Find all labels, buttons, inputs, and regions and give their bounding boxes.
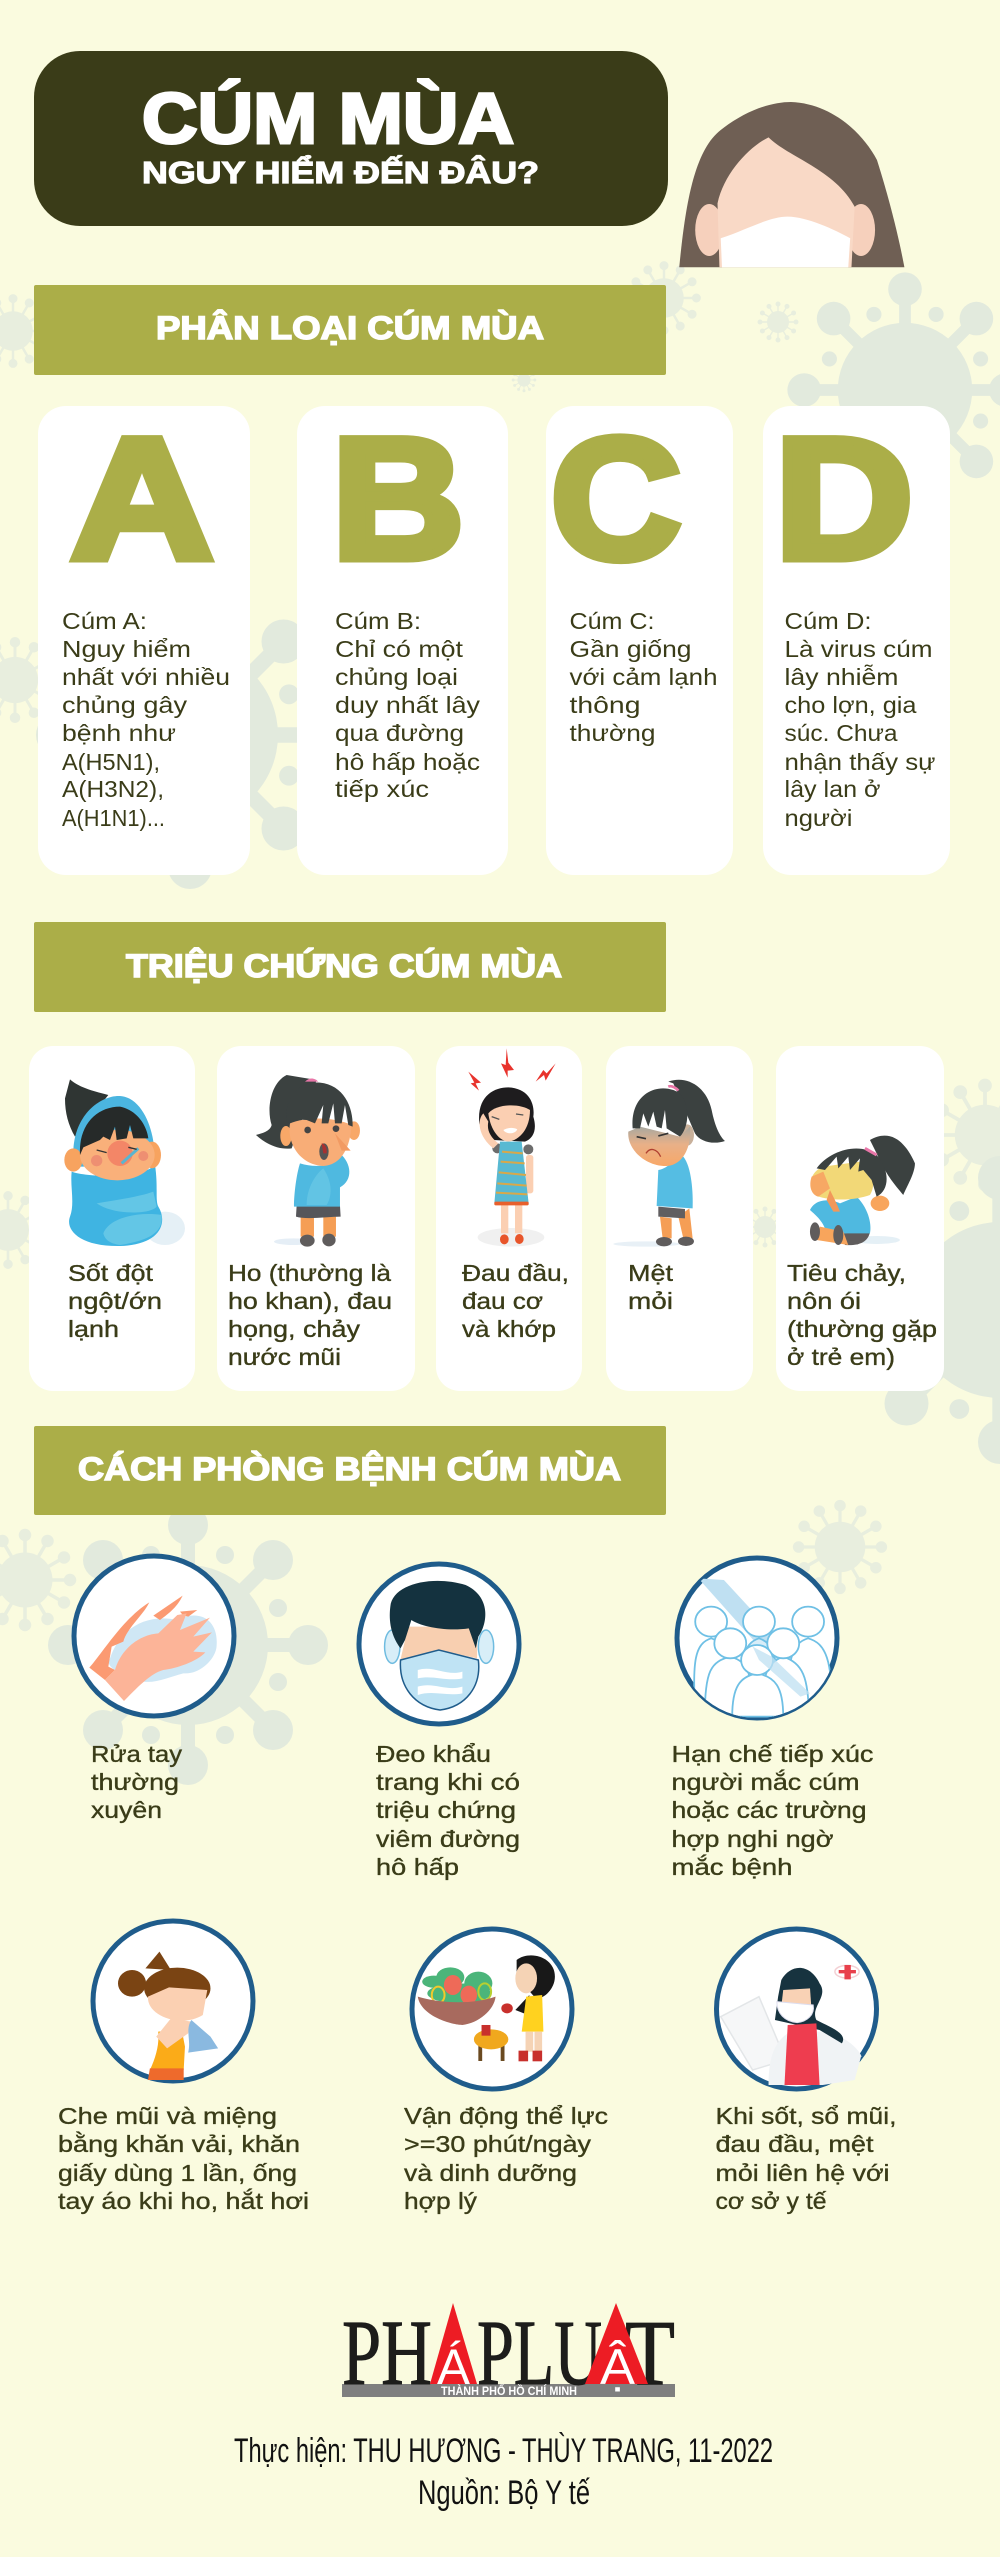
panel: đau đầu bbox=[436, 1046, 582, 1391]
icon: child with headache bbox=[468, 1048, 556, 1247]
panel: rửa tay bbox=[74, 1556, 234, 1823]
text: hạn chế tiếp xúc: hoặc các trường bbox=[672, 1797, 866, 1823]
letter D: D bbox=[775, 403, 913, 595]
subtitle: NGUY HIỂM ĐẾN ĐÂU? bbox=[142, 154, 539, 190]
main title: CÚM MÙA bbox=[142, 80, 514, 159]
description A: chủng gây bbox=[62, 692, 188, 718]
description B: Cúm B: bbox=[335, 608, 421, 634]
text: hạn chế tiếp xúc bbox=[672, 1741, 874, 1880]
panel: vận động dinh dưỡng bbox=[404, 1929, 608, 2214]
text: ho: Ho (thường là bbox=[228, 1260, 391, 1286]
text: tiêu chảy: ở trẻ em) bbox=[787, 1344, 895, 1370]
heading: phân loại: PHÂN LOẠI CÚM MÙA bbox=[156, 310, 544, 346]
icon: sitting child with nausea bbox=[810, 1136, 915, 1245]
panel: đeo khẩu trang bbox=[359, 1564, 520, 1880]
text: che mũi miệng: giấy dùng 1 lần, ống bbox=[58, 2160, 297, 2186]
logo: Pháp Luật: T bbox=[625, 2302, 675, 2405]
source line: Nguồn: Bộ Y tế bbox=[418, 2474, 590, 2512]
description C: Cúm C: bbox=[570, 608, 654, 634]
panel: tiêu chảy bbox=[776, 1046, 944, 1391]
description D: người bbox=[784, 805, 852, 831]
letter C: C bbox=[551, 403, 681, 595]
text: vận động bbox=[404, 2103, 608, 2214]
text: liên hệ y tế bbox=[716, 2103, 896, 2214]
description D: súc. Chưa bbox=[784, 720, 898, 746]
icon: salad bowl and woman bbox=[412, 1929, 572, 2089]
text: ho: nước mũi bbox=[228, 1344, 341, 1370]
letter B: B bbox=[332, 403, 464, 595]
text: đau đầu: Đau đầu, bbox=[462, 1260, 569, 1286]
text: tiêu chảy: nôn ói bbox=[787, 1288, 861, 1314]
description C: thường bbox=[570, 720, 656, 746]
description D: lây lan ở bbox=[784, 776, 880, 802]
icon: man wearing mask bbox=[359, 1564, 519, 1724]
text: đau đầu: đau cơ bbox=[462, 1288, 543, 1314]
text: ho bbox=[228, 1260, 392, 1370]
panel: sốt bbox=[29, 1046, 195, 1391]
text: tiêu chảy: (thường gặp bbox=[787, 1316, 937, 1342]
letter A: A bbox=[71, 403, 213, 595]
panel: cúm D bbox=[763, 403, 950, 875]
text: đeo khẩu trang: viêm đường bbox=[376, 1826, 520, 1852]
description B bbox=[335, 608, 481, 802]
text: hạn chế tiếp xúc: Hạn chế tiếp xúc bbox=[672, 1741, 874, 1767]
text: mệt mỏi bbox=[628, 1260, 674, 1314]
description D: lây nhiễm bbox=[784, 664, 898, 690]
heading: triệu chứng: TRIỆU CHỨNG CÚM MÙA bbox=[126, 948, 562, 984]
description C: Gần giống bbox=[570, 636, 692, 662]
text: che mũi miệng: tay áo khi ho, hắt hơi bbox=[58, 2188, 309, 2214]
background virus pattern bbox=[0, 262, 1000, 1785]
description C: với cảm lạnh bbox=[570, 664, 718, 690]
logo: Pháp Luật: THÀNH PHỐ HỒ CHÍ MINH bbox=[441, 2383, 577, 2398]
icon: child coughing bbox=[256, 1075, 360, 1247]
text: liên hệ y tế: mỏi liên hệ với bbox=[716, 2160, 890, 2186]
text: đeo khẩu trang: Đeo khẩu bbox=[376, 1741, 491, 1767]
text: ho: ho khan), đau bbox=[228, 1288, 392, 1314]
description A: A(H3N2), bbox=[62, 776, 164, 802]
text: mệt mỏi: Mệt bbox=[628, 1260, 674, 1286]
text: hạn chế tiếp xúc: hợp nghi ngờ bbox=[672, 1826, 834, 1852]
text: ho: họng, chảy bbox=[228, 1316, 361, 1342]
panel: hạn chế tiếp xúc bbox=[672, 1558, 874, 1880]
icon: crowd crossed out bbox=[677, 1558, 837, 1718]
description A: A(H5N1), bbox=[62, 749, 160, 775]
panel: che mũi miệng bbox=[58, 1921, 309, 2214]
description D: Cúm D: bbox=[784, 608, 872, 634]
icon: girl covering nose with tissue bbox=[93, 1921, 253, 2081]
icon: doctor with mask bbox=[716, 1929, 876, 2089]
text: sốt bbox=[68, 1260, 162, 1342]
logo: Pháp Luật: PLU bbox=[477, 2302, 602, 2405]
panel: cúm A bbox=[38, 403, 250, 875]
description B: Chỉ có một bbox=[335, 636, 464, 662]
description B: hô hấp hoặc bbox=[335, 749, 480, 775]
icon: washing hands bbox=[74, 1556, 234, 1716]
text: sốt: ngột/ớn bbox=[68, 1288, 162, 1314]
text: rửa tay: xuyên bbox=[91, 1797, 162, 1823]
heading: triệu chứng bbox=[34, 922, 666, 1012]
text: hạn chế tiếp xúc: người mắc cúm bbox=[672, 1769, 860, 1795]
icon: child wrapped in blanket with thermometer bbox=[64, 1079, 185, 1246]
description A: nhất với nhiều bbox=[62, 664, 230, 690]
text: đeo khẩu trang bbox=[376, 1741, 520, 1880]
text: tiêu chảy bbox=[787, 1260, 937, 1370]
heading: cách phòng bệnh: CÁCH PHÒNG BỆNH CÚM MÙA bbox=[78, 1451, 621, 1487]
description A: bệnh như bbox=[62, 720, 176, 746]
logo: Pháp Luật: Á bbox=[437, 2339, 471, 2395]
text: tiêu chảy: Tiêu chảy, bbox=[787, 1260, 906, 1286]
description D bbox=[784, 608, 936, 831]
text: rửa tay bbox=[91, 1741, 183, 1823]
panel: cúm B bbox=[297, 403, 508, 875]
logo: Pháp Luật bbox=[342, 2302, 675, 2405]
text: sốt: Sốt đột bbox=[68, 1260, 154, 1286]
text: đeo khẩu trang: hô hấp bbox=[376, 1854, 459, 1880]
credit line: Thực hiện: THU HƯƠNG - THÙY TRANG, 11-2022 bbox=[234, 2432, 773, 2470]
text: liên hệ y tế: Khi sốt, sổ mũi, bbox=[716, 2103, 896, 2129]
text: vận động: hợp lý bbox=[404, 2188, 478, 2214]
icon: tired child bbox=[613, 1080, 725, 1247]
description A: A(H1N1)... bbox=[62, 805, 165, 831]
text: đau đầu: và khớp bbox=[462, 1316, 556, 1342]
description A: Nguy hiểm bbox=[62, 636, 191, 662]
icon: woman wearing mask bbox=[679, 102, 904, 267]
description D: nhận thấy sự bbox=[784, 749, 936, 775]
text: che mũi miệng bbox=[58, 2103, 309, 2214]
text: vận động: và dinh dưỡng bbox=[404, 2160, 577, 2186]
logo: Pháp Luật: Ậ bbox=[600, 2339, 636, 2395]
panel: cúm C bbox=[546, 403, 733, 875]
text: vận động: Vận động thể lực bbox=[404, 2103, 608, 2129]
text: rửa tay: thường bbox=[91, 1769, 179, 1795]
description D: Là virus cúm bbox=[784, 636, 932, 662]
text: che mũi miệng: bằng khăn vải, khăn bbox=[58, 2131, 300, 2157]
description D: cho lợn, gia bbox=[784, 692, 917, 718]
text: đeo khẩu trang: trang khi có bbox=[376, 1769, 520, 1795]
text: hạn chế tiếp xúc: mắc bệnh bbox=[672, 1854, 792, 1880]
text: đau đầu bbox=[462, 1260, 569, 1342]
description B: chủng loại bbox=[335, 664, 458, 690]
description B: tiếp xúc bbox=[335, 776, 429, 802]
text: liên hệ y tế: đau đầu, mệt bbox=[716, 2131, 874, 2157]
text: vận động: >=30 phút/ngày bbox=[404, 2131, 592, 2157]
heading: phân loại bbox=[34, 285, 666, 375]
description B: qua đường bbox=[335, 720, 464, 746]
description A: Cúm A: bbox=[62, 608, 147, 634]
text: liên hệ y tế: cơ sở y tế bbox=[716, 2188, 827, 2214]
description C bbox=[570, 608, 718, 746]
text: che mũi miệng: Che mũi và miệng bbox=[58, 2103, 277, 2129]
description B: duy nhất lây bbox=[335, 692, 481, 718]
panel: mệt mỏi bbox=[606, 1046, 753, 1391]
logo: Pháp Luật: PH bbox=[342, 2302, 432, 2405]
description C: thông bbox=[570, 692, 640, 718]
heading: cách phòng bệnh bbox=[34, 1426, 666, 1515]
panel: ho bbox=[217, 1046, 415, 1391]
text: rửa tay: Rửa tay bbox=[91, 1741, 183, 1767]
text: đeo khẩu trang: triệu chứng bbox=[376, 1797, 516, 1823]
text: mệt mỏi: mỏi bbox=[628, 1288, 673, 1314]
text: sốt: lạnh bbox=[68, 1316, 119, 1342]
panel: liên hệ y tế bbox=[716, 1929, 896, 2214]
description A bbox=[62, 608, 230, 831]
title banner bbox=[34, 51, 668, 226]
